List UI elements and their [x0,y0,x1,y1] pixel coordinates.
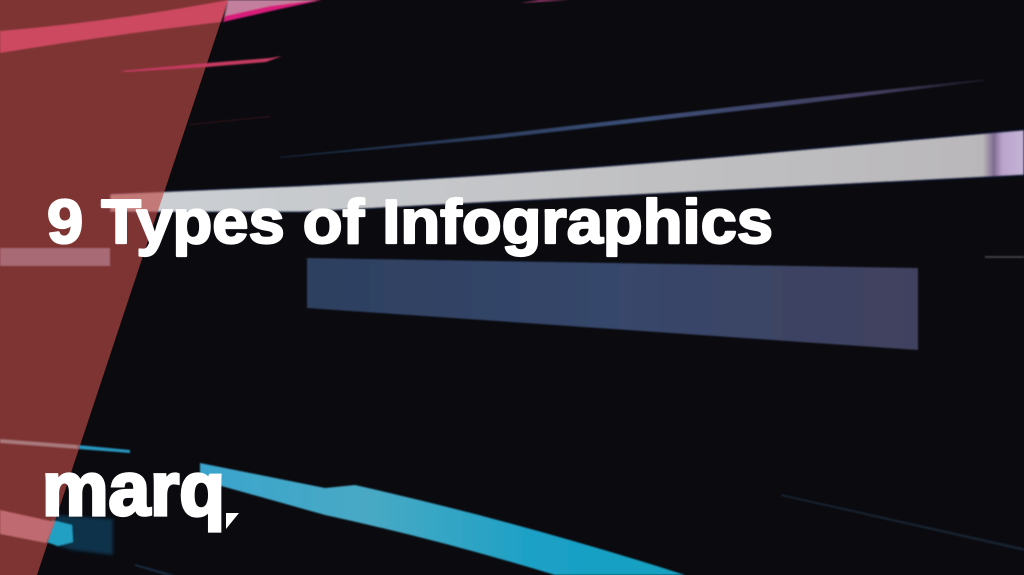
logo: marq: marq [42,447,225,532]
overlay streaks on the panel [0,0,570,543]
streak: short top pink tick [520,0,570,3]
red translucent panel [0,0,228,575]
title: 9 Types of Infographics [47,188,773,257]
streak: cyan cube [46,520,73,546]
streak: faint bottom line [135,564,175,575]
streak: wide white light bar [110,130,1024,212]
streak: pink lower-left beam [0,510,55,543]
streak: faint dark red line [190,116,270,125]
streak: dark blue block [55,515,113,555]
streak: cyan ribbon [200,463,685,575]
streak: hot pink edge [223,0,322,22]
streak: pink top curve [0,0,228,53]
streak: small right tick [985,256,1024,258]
streak: slate blue panel [307,258,918,350]
streak: thin blue line [280,79,985,158]
streak: faint bottom-right line [781,494,1024,551]
streak: magenta top curve [224,0,320,18]
streak: left stub bar [0,248,110,266]
streak: thin pink line [121,56,282,72]
streak: small cyan line [78,445,130,453]
streak: pale line on panel [0,439,78,449]
